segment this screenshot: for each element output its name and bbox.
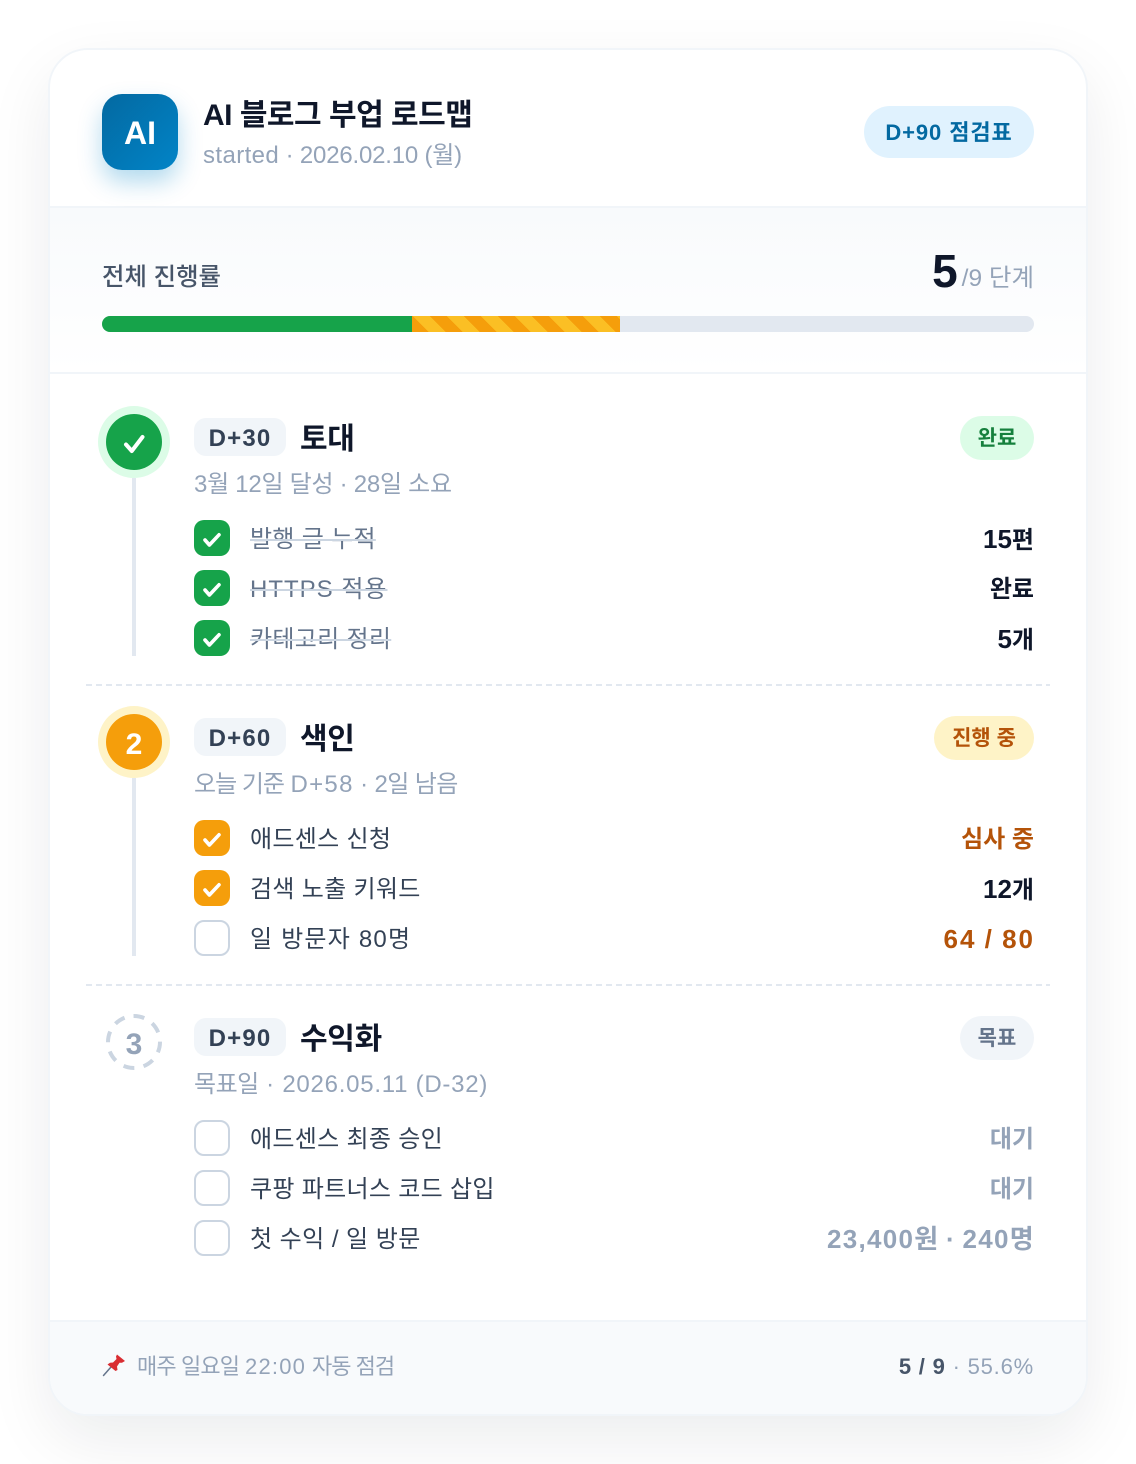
section: D+30 xyxy=(98,406,1034,656)
phase note: 3월 12일 달성 · 28일 소요 xyxy=(194,471,452,498)
status badge xyxy=(960,416,1034,460)
icon: AI logo xyxy=(102,94,178,170)
icon: completed node xyxy=(98,406,170,478)
status badge: 진행 중 xyxy=(952,727,1016,750)
status badge: 완료 xyxy=(978,427,1016,450)
phase title: 토대 xyxy=(300,423,355,456)
done segment xyxy=(102,316,412,332)
phase title: 수익화 xyxy=(300,1023,382,1056)
status badge xyxy=(934,716,1034,760)
item: keywords xyxy=(194,870,1034,906)
progress bar xyxy=(102,316,1034,332)
item: categories xyxy=(194,620,1034,656)
item: posts: 15편 xyxy=(983,524,1034,554)
status badge xyxy=(960,1016,1034,1060)
phase note: 오늘 기준 D+58 · 2일 남음 xyxy=(194,771,458,798)
section: D+90 xyxy=(106,1014,1035,1256)
icon: active node xyxy=(98,706,170,778)
progress count: 5/9 단계 xyxy=(932,245,1034,297)
phase tag xyxy=(194,418,286,456)
item: posts: 발행 글 누적 xyxy=(250,526,376,553)
item: visitors: 64 / 80 xyxy=(943,924,1035,954)
phase tag: D+30 xyxy=(209,425,271,452)
footer xyxy=(50,1320,1086,1414)
icon: active node: 2 xyxy=(126,728,142,761)
item: visitors xyxy=(194,920,1035,956)
item: coupang: 대기 xyxy=(990,1176,1034,1203)
phase note: 목표일 · 2026.05.11 (D-32) xyxy=(194,1071,488,1098)
item: final approval xyxy=(194,1120,1034,1156)
icon: AI logo: AI xyxy=(124,115,156,151)
item: keywords: 12개 xyxy=(983,874,1034,904)
item: first revenue: 첫 수익 / 일 방문 xyxy=(250,1226,421,1253)
icon: pin xyxy=(102,1354,125,1376)
item: coupang xyxy=(194,1170,1034,1206)
item: keywords: 검색 노출 키워드 xyxy=(250,876,421,903)
panel: overall progress xyxy=(50,208,1086,374)
start date: started · 2026.02.10 (월) xyxy=(203,142,462,169)
header xyxy=(50,50,1086,208)
item: visitors: 일 방문자 80명 xyxy=(250,926,411,953)
icon: pending node: 3 xyxy=(126,1028,142,1061)
phase tag xyxy=(194,1018,286,1056)
item: https: HTTPS 적용 xyxy=(250,576,388,603)
phase tag: D+90 xyxy=(209,1025,271,1052)
item: first revenue: 23,400원 · 240명 xyxy=(827,1224,1035,1254)
item: adsense xyxy=(194,820,1034,856)
title: AI 블로그 부업 로드맵 xyxy=(203,99,472,132)
status badge: 목표 xyxy=(978,1027,1016,1050)
item: first revenue xyxy=(194,1220,1035,1256)
phase tag xyxy=(194,718,286,756)
phase tag: D+60 xyxy=(209,725,271,752)
item: adsense: 애드센스 신청 xyxy=(250,826,391,853)
item: categories: 카테고리 정리 xyxy=(250,626,391,653)
timeline line xyxy=(132,778,136,956)
timeline line xyxy=(132,478,136,656)
section: D+60 xyxy=(98,706,1035,956)
item: posts xyxy=(194,520,1034,556)
icon: pending node xyxy=(106,1014,162,1070)
phase title: 색인 xyxy=(300,723,355,756)
footer note: 매주 일요일 22:00 자동 점검 xyxy=(137,1354,394,1379)
item: coupang: 쿠팡 파트너스 코드 삽입 xyxy=(250,1176,495,1203)
item: categories: 5개 xyxy=(997,624,1034,654)
item: https xyxy=(194,570,1034,606)
footer stats: 5 / 9 · 55.6% xyxy=(899,1354,1034,1379)
item: final approval: 대기 xyxy=(990,1126,1034,1153)
item: final approval: 애드센스 최종 승인 xyxy=(250,1126,443,1153)
badge: D+90 checklist: D+90 점검표 xyxy=(885,120,1013,145)
progress label: 전체 진행률 xyxy=(102,264,221,291)
in-progress segment xyxy=(412,316,620,332)
item: adsense: 심사 중 xyxy=(961,826,1034,853)
badge: D+90 checklist xyxy=(864,106,1034,158)
item: https: 완료 xyxy=(990,576,1034,603)
